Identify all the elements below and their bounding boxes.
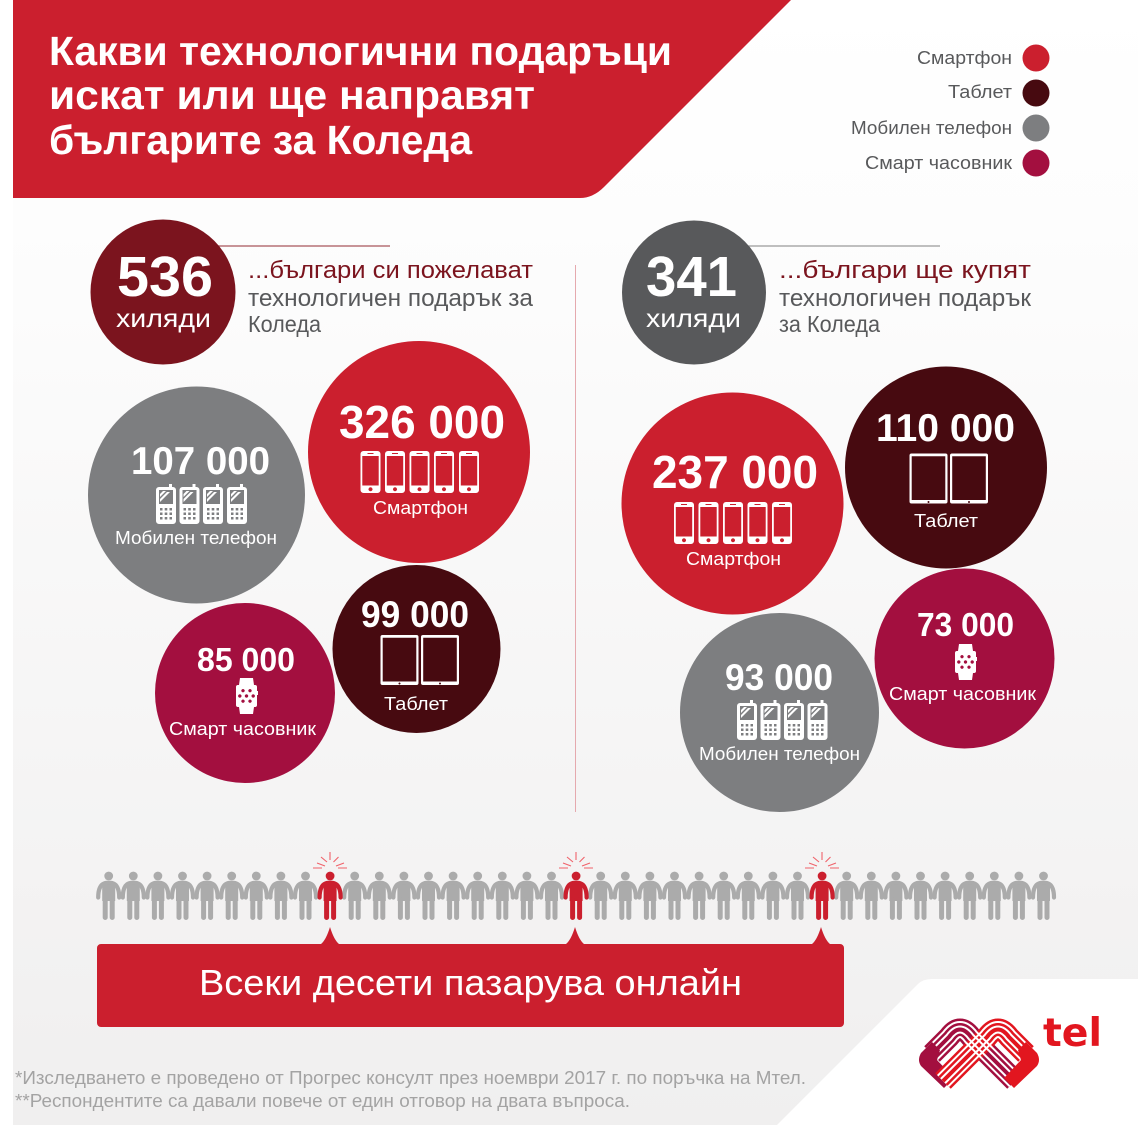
bubble: tablet purchases: 110 000 bbox=[876, 407, 1015, 450]
panel: wishes summary bbox=[90, 220, 534, 364]
panel: purchases summary: хиляди bbox=[646, 303, 741, 333]
bubble: smartphone purchases: 237 000 bbox=[652, 446, 818, 498]
bubble: tablet wishes bbox=[332, 565, 500, 733]
bubble: smartwatch wishes: Смарт часовник bbox=[169, 719, 316, 739]
panel: title banner bbox=[13, 0, 791, 198]
bubble: mobile phone wishes: Мобилен телефон bbox=[115, 528, 277, 548]
callout: every tenth shops online bbox=[97, 927, 844, 1027]
legend: Смарт часовник bbox=[865, 153, 1012, 173]
title: българите за Коледа bbox=[49, 117, 473, 163]
bubble: smartphone purchases bbox=[622, 392, 844, 614]
highlighted people: online shoppers bbox=[313, 852, 839, 918]
logo mark bbox=[919, 1030, 1039, 1088]
panel: wishes summary: 536 bbox=[117, 245, 213, 309]
bubble: smartwatch wishes: 85 000 bbox=[197, 641, 295, 678]
bubble: tablet purchases bbox=[845, 366, 1047, 568]
legend: Таблет bbox=[948, 82, 1012, 102]
bubble: smartphone purchases: Смартфон bbox=[686, 549, 781, 569]
center divider bbox=[574, 265, 576, 812]
legend bbox=[851, 44, 1050, 176]
title: Какви технологични подаръци bbox=[49, 28, 672, 74]
bubble: mobile phone wishes bbox=[88, 386, 305, 604]
panel: purchases summary: технологичен подарък bbox=[779, 285, 1032, 312]
logo wordmark: tel bbox=[1043, 1011, 1102, 1056]
title: искат или ще направят bbox=[49, 72, 535, 118]
footnotes bbox=[15, 1068, 806, 1111]
panel: white logo corner bbox=[777, 979, 1138, 1125]
footnotes: **Респондентите са давали повече от един отговор на двата въпроса. bbox=[15, 1091, 630, 1111]
bubble: smartwatch purchases: 73 000 bbox=[917, 606, 1014, 643]
callout: every tenth shops online: Всеки десети пазарува онлайн bbox=[199, 962, 742, 1003]
bubble: smartphone wishes: Смартфон bbox=[373, 498, 468, 518]
panel: purchases summary: ...българи ще купят bbox=[779, 257, 1031, 284]
footnotes: *Изследването е проведено от Прогрес консулт през ноември 2017 г. по поръчка на Мтел. bbox=[15, 1068, 806, 1088]
legend: Смартфон bbox=[917, 48, 1012, 68]
bubble: mobile phone purchases: Мобилен телефон bbox=[699, 744, 860, 764]
bubble: smartphone wishes bbox=[308, 341, 530, 563]
legend: Мобилен телефон bbox=[851, 118, 1012, 138]
bubble: mobile phone purchases bbox=[680, 613, 879, 812]
title bbox=[49, 28, 672, 163]
bubble: tablet wishes: Таблет bbox=[384, 694, 448, 714]
bubble: mobile phone purchases: 93 000 bbox=[725, 657, 833, 698]
bubble: tablet wishes: 99 000 bbox=[361, 594, 469, 635]
bubble: smartwatch purchases bbox=[874, 568, 1054, 748]
panel: wishes summary: ...българи си пожелават bbox=[248, 257, 533, 284]
bubble: tablet purchases: Таблет bbox=[914, 511, 978, 531]
bubble: smartwatch purchases: Смарт часовник bbox=[889, 684, 1036, 704]
panel: wishes summary: Коледа bbox=[248, 311, 321, 337]
panel: purchases summary: за Коледа bbox=[779, 311, 880, 337]
panel: wishes summary: хиляди bbox=[116, 303, 211, 333]
logo: Mtel bbox=[919, 1011, 1102, 1088]
row of people icons bbox=[98, 872, 1054, 918]
bubble: smartphone wishes: 326 000 bbox=[339, 396, 505, 448]
panel: purchases summary bbox=[622, 220, 1032, 364]
panel: wishes summary: технологичен подарък за bbox=[248, 285, 534, 312]
panel: purchases summary: 341 bbox=[646, 245, 737, 309]
bubble: smartwatch wishes bbox=[155, 603, 335, 783]
bubble: mobile phone wishes: 107 000 bbox=[131, 440, 270, 483]
